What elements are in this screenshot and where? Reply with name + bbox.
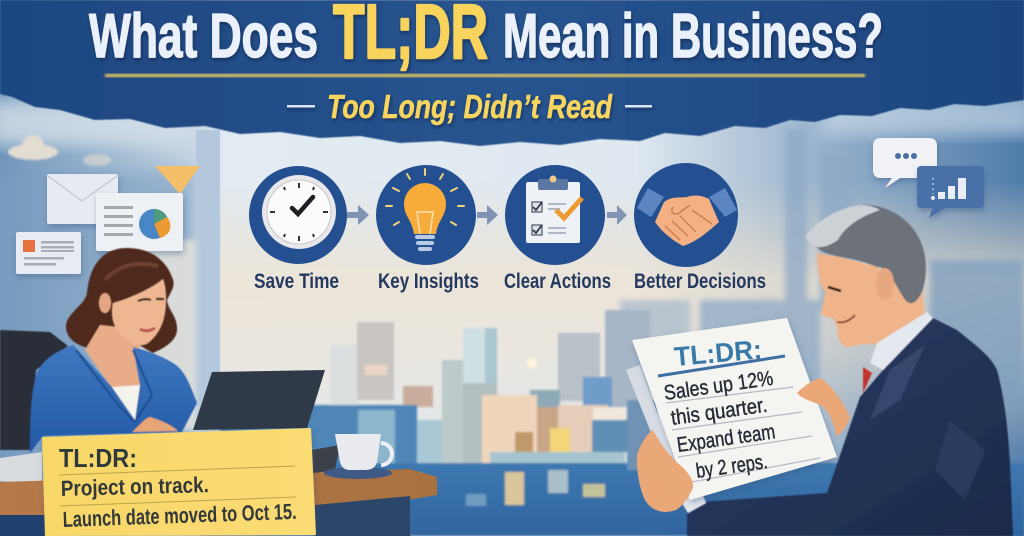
step: clear actions: Clear Actions — [504, 270, 611, 293]
step: save time — [249, 166, 347, 293]
hair back — [66, 248, 177, 353]
hands — [637, 430, 693, 512]
heading — [89, 0, 883, 75]
icon: chart bubble — [917, 166, 984, 218]
neck — [85, 325, 145, 420]
step: better decisions: Better Decisions — [634, 270, 766, 293]
paper text: by 2 reps. — [694, 450, 769, 483]
city skyline — [200, 310, 1024, 536]
paper text — [662, 367, 777, 483]
icon: envelope — [47, 174, 118, 224]
note: project summary: Project on track. — [60, 472, 209, 501]
icon: clipboard — [526, 176, 582, 243]
woman at laptop — [0, 248, 197, 453]
desk with laptop, cup and note — [0, 370, 437, 536]
hair — [805, 205, 926, 303]
neck and face — [817, 253, 925, 347]
arrow 1 — [347, 205, 369, 225]
cuff — [680, 487, 706, 513]
icon: light bulb — [386, 169, 464, 251]
books — [0, 452, 42, 486]
icon: profile card — [16, 232, 81, 274]
benefits row — [249, 163, 766, 293]
note: project summary: TL:DR: — [59, 443, 137, 473]
left wall shading — [0, 170, 195, 460]
paper text: this quarter. — [669, 394, 769, 430]
jacket — [30, 345, 197, 453]
note: project summary: Launch date moved to Oct 15. — [62, 499, 297, 532]
subtitle: Too Long; Didn’t Read — [327, 88, 613, 125]
chair — [0, 330, 68, 450]
arrow 3 — [607, 205, 627, 225]
speech bubbles — [873, 138, 984, 218]
icon: clock — [262, 175, 336, 249]
icon: handshake — [637, 188, 737, 246]
coffee cup — [324, 434, 392, 479]
suit — [687, 318, 1013, 536]
collar and tie — [870, 312, 933, 370]
face — [112, 279, 166, 345]
arrow 2 — [477, 205, 498, 225]
step: key insights: Key Insights — [378, 270, 479, 293]
icon: pie chart card — [96, 193, 183, 251]
note: project summary — [42, 428, 316, 536]
paper heading: TL:DR: — [673, 334, 763, 372]
icon: chat bubble — [873, 138, 937, 188]
paper text: Expand team — [675, 420, 777, 457]
step: clear actions — [504, 165, 611, 293]
paper text: Sales up 12% — [662, 367, 775, 405]
hands — [132, 417, 178, 432]
blouse — [112, 385, 140, 420]
clouds — [8, 135, 111, 166]
icon: floating documents — [16, 166, 200, 274]
man reading — [680, 205, 1013, 536]
desk — [0, 469, 437, 516]
step: better decisions — [634, 163, 766, 293]
paper: sales summary — [626, 318, 850, 512]
step: key insights — [376, 165, 479, 293]
icon: yellow triangle — [155, 166, 200, 194]
title banner — [0, 0, 1024, 146]
heading: What Does — [89, 2, 318, 71]
hair highlight — [105, 264, 158, 280]
step: save time: Save Time — [254, 270, 339, 293]
laptop — [193, 370, 325, 430]
distant right skyline — [620, 130, 1024, 410]
ear — [876, 268, 894, 300]
